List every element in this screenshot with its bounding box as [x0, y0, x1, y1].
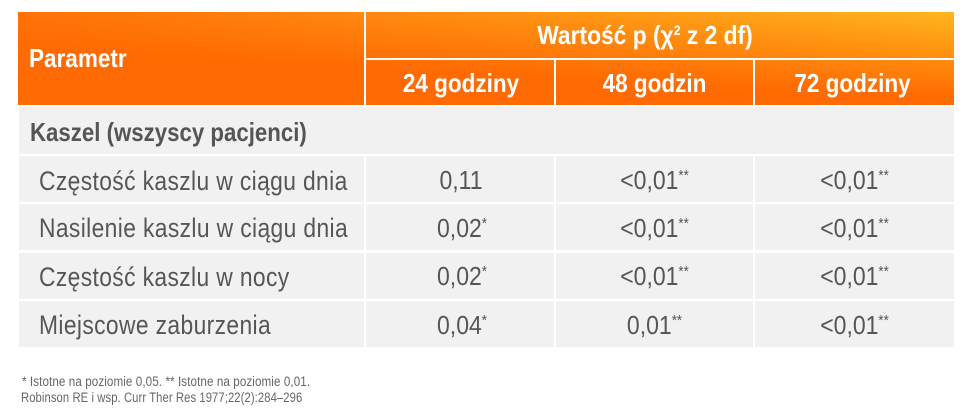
heading: 24 godziny: 24 godziny — [403, 68, 519, 98]
row: Miejscowe zaburzenia: <0,01** — [820, 310, 889, 340]
row: Nasilenie kaszlu w ciągu dnia: 0,02* — [437, 213, 487, 243]
row: Częstość kaszlu w nocy: 0,02* — [437, 261, 487, 291]
row: Nasilenie kaszlu w ciągu dnia: Nasilenie kaszlu w ciągu dnia — [39, 213, 348, 243]
footnote: Robinson RE i wsp. Curr Ther Res 1977;22(2):284–296 — [21, 390, 302, 405]
heading: Wartość p: Wartość p (χ2 z 2 df) — [537, 20, 753, 50]
heading: 48 godzin: 48 godzin — [603, 68, 706, 98]
row: Miejscowe zaburzenia: Miejscowe zaburzenia — [39, 310, 271, 340]
row: Częstość kaszlu w ciągu dnia: Częstość kaszlu w ciągu dnia — [39, 166, 348, 196]
row: Częstość kaszlu w nocy: <0,01** — [620, 261, 689, 291]
heading: Parametr: Parametr — [29, 43, 127, 73]
header background — [18, 12, 954, 105]
row: Częstość kaszlu w ciągu dnia: 0,11 — [439, 165, 483, 195]
row: Częstość kaszlu w nocy: <0,01** — [820, 261, 889, 291]
row: Nasilenie kaszlu w ciągu dnia — [19, 204, 954, 250]
row: Częstość kaszlu w ciągu dnia — [19, 156, 954, 202]
heading: 72 godziny: 72 godziny — [794, 68, 911, 98]
row: Częstość kaszlu w nocy — [19, 253, 954, 299]
footnote — [21, 374, 310, 405]
row: Miejscowe zaburzenia — [19, 301, 954, 347]
table — [18, 12, 954, 347]
row: Miejscowe zaburzenia: 0,01** — [627, 310, 682, 340]
row: Nasilenie kaszlu w ciągu dnia: <0,01** — [620, 213, 689, 243]
row: Częstość kaszlu w ciągu dnia: <0,01** — [820, 165, 889, 195]
section row: Kaszel — [19, 107, 954, 154]
section row: Kaszel: Kaszel (wszyscy pacjenci) — [30, 117, 307, 147]
row: Nasilenie kaszlu w ciągu dnia: <0,01** — [820, 213, 889, 243]
row: Częstość kaszlu w nocy: Częstość kaszlu w nocy — [39, 262, 290, 292]
row: Częstość kaszlu w ciągu dnia: <0,01** — [620, 165, 689, 195]
footnote: * Istotne na poziomie 0,05. ** Istotne na poziomie 0,01. — [22, 374, 310, 389]
row: Miejscowe zaburzenia: 0,04* — [437, 310, 487, 340]
